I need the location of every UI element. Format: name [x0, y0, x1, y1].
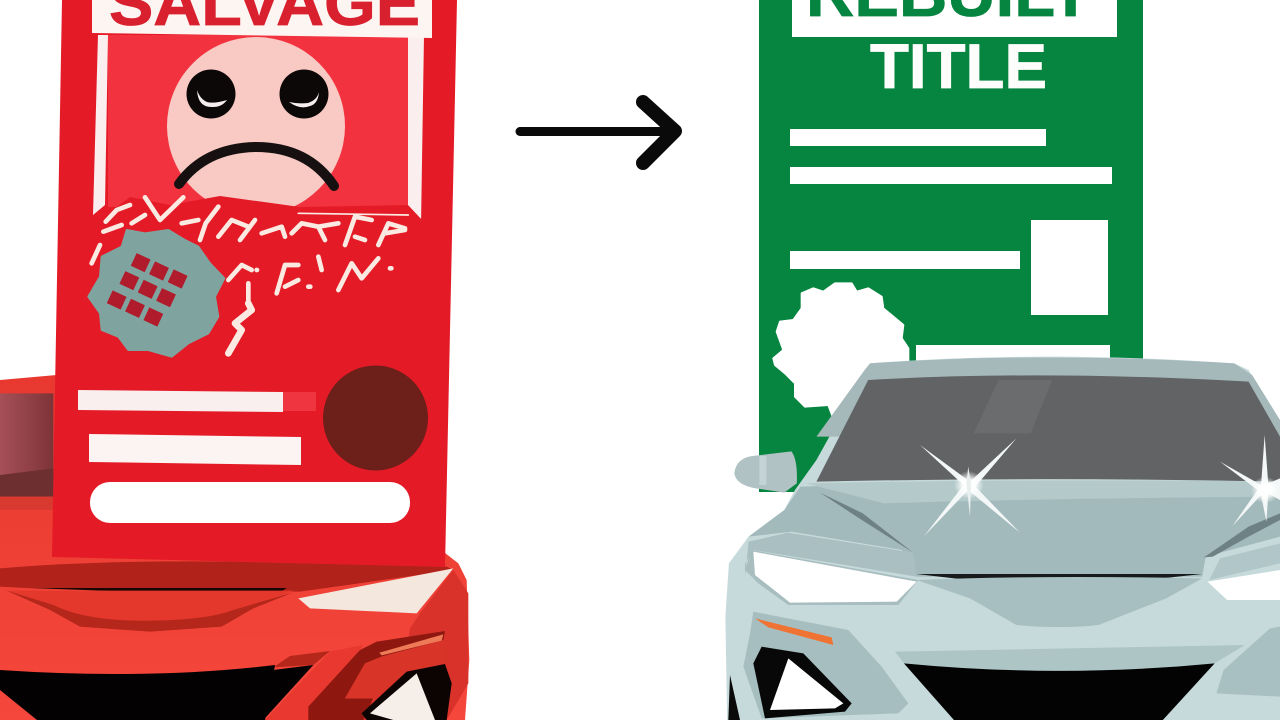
bright fender wedge	[265, 645, 363, 720]
silver car front left detail	[728, 550, 918, 720]
white fog lamp	[770, 658, 843, 710]
salvage label box	[92, 0, 432, 38]
orange indicator	[379, 634, 443, 655]
hood slit	[33, 588, 287, 593]
hood crease left	[820, 493, 913, 552]
black fog lamp	[362, 664, 452, 720]
title heading: TITLE	[870, 32, 1047, 102]
white seal	[773, 283, 908, 418]
photo box	[1031, 220, 1108, 315]
car hood shadow band	[0, 561, 453, 592]
black fog lamp	[753, 647, 852, 718]
arrow	[520, 102, 675, 163]
hood crease right	[1204, 513, 1280, 557]
seal grid	[107, 253, 188, 327]
black grille	[904, 663, 1215, 720]
center dimple	[916, 577, 1202, 627]
side mirror	[734, 451, 797, 493]
roof	[816, 357, 1280, 437]
lower trim above grille	[895, 645, 1245, 671]
left headlight	[753, 552, 917, 603]
hood dimple	[7, 591, 293, 632]
form pill	[90, 482, 410, 523]
orange indicator	[755, 618, 833, 645]
grey seal	[88, 230, 224, 357]
red car front right detail	[260, 568, 468, 720]
green rebuilt title document	[759, 0, 1143, 492]
inner red panel	[108, 35, 408, 207]
rebuilt label box	[792, 0, 1117, 37]
red damaged car	[0, 375, 469, 720]
silver restored car	[725, 357, 1280, 720]
sad face	[167, 37, 345, 215]
car side window	[0, 393, 53, 497]
windshield	[816, 375, 1280, 482]
fog lamp dark housing	[308, 631, 445, 720]
headlight	[298, 568, 453, 613]
wing shade	[360, 570, 468, 720]
form line one	[78, 390, 283, 412]
hood	[749, 481, 1280, 577]
red car black grille	[0, 665, 275, 720]
red salvage title document	[52, 0, 457, 567]
form lines	[790, 129, 1046, 146]
car body	[725, 357, 1280, 720]
red overlay below face	[97, 196, 424, 250]
sparkle two	[1220, 435, 1280, 526]
dark round stamp	[323, 366, 428, 470]
hood slit	[916, 574, 1202, 579]
fog lamp inner panel	[345, 640, 447, 698]
lower left black vent	[728, 675, 740, 720]
white frame	[93, 35, 424, 225]
white fog lamp	[370, 673, 435, 720]
sparkle one	[920, 438, 1020, 536]
form line two	[89, 434, 301, 465]
scribbled damaged text	[92, 197, 408, 353]
right fog housing	[1216, 627, 1280, 697]
right headlight	[1207, 570, 1280, 600]
grille right end	[260, 665, 313, 720]
lower form line	[916, 345, 1110, 365]
headlight surround	[745, 550, 918, 605]
fender	[745, 533, 916, 577]
grille trim	[273, 651, 330, 667]
fog housing	[743, 612, 908, 718]
